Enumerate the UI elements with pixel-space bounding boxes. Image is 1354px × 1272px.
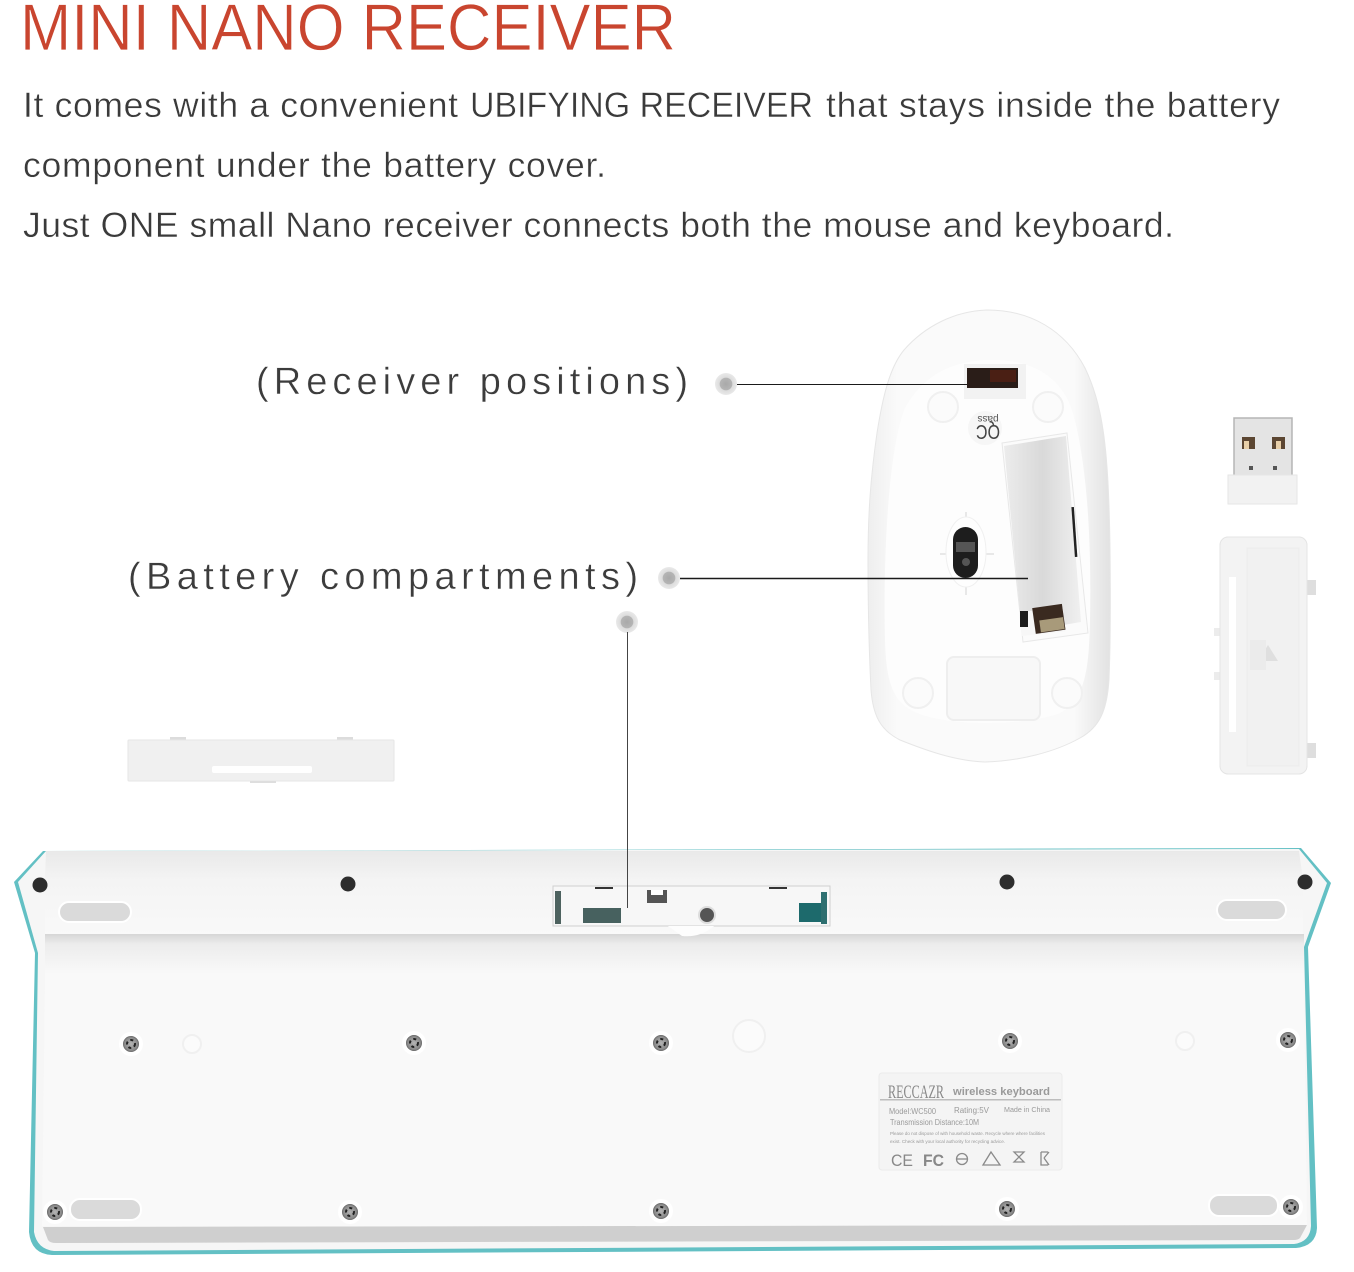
keyboard rating label: FC [923,1151,944,1170]
callout: battery compartments [128,556,1028,598]
keyboard battery slot [553,886,830,936]
illustration: keyboard battery cover [128,737,394,783]
intro text [23,85,1280,245]
keyboard rating label: Model:WC500 [889,1107,937,1116]
keyboard rating label: wireless keyboard [952,1086,1050,1098]
battery compartment [1002,433,1088,642]
keyboard body [18,849,1327,1251]
illustration: nano USB receiver [1228,418,1297,504]
intro text: that stays inside the battery [826,85,1280,125]
keyboard rating label: RECCAZR [888,1082,944,1103]
intro text: It comes with a convenient [23,85,458,125]
keyboard rating label: Made in China [1004,1107,1050,1114]
keyboard bumps [183,1020,1194,1053]
keyboard rating label: CE [891,1151,913,1170]
QC pass sticker: QC [976,420,1000,442]
intro text: Just ONE small Nano receiver connects both the mouse and keyboard. [23,205,1174,245]
illustration: mouse battery cover [1214,537,1316,774]
keyboard bottom lip [43,1225,1307,1243]
power switch [940,512,994,595]
callout: battery compartments: (Battery compartments) [128,556,638,598]
keyboard rubber pads [59,900,1286,1220]
QC pass sticker [968,411,1002,445]
keyboard main panel [42,934,1307,1226]
QC pass sticker: pass [977,413,999,424]
keyboard rating label: Please do not dispose of with household waste. Recycle where where facilities [890,1131,1046,1136]
keyboard rating label [879,1073,1062,1170]
intro text: UBIFYING RECEIVER [470,85,813,125]
illustration: mouse underside [868,310,1110,762]
keyboard top ridge [45,851,1303,936]
mouse feet [903,392,1082,708]
illustration: keyboard underside [14,848,1331,1255]
rating plate [947,657,1040,720]
keyboard teal shell [14,848,1331,1255]
keyboard screws [45,1030,1301,1222]
receiver slot [964,364,1026,399]
callout: receiver positions [256,361,967,403]
keyboard top holes [32,874,1312,892]
keyboard rating label: Transmission Distance:10M [890,1118,979,1127]
callout: keyboard battery compartment pointer [616,611,638,908]
intro text: component under the battery cover. [23,145,606,185]
keyboard rating label: Rating:5V [954,1106,990,1115]
keyboard rating label: exist. Check with your local authority for recycling advice. [890,1139,1005,1144]
callout: receiver positions: (Receiver positions) [256,361,688,403]
